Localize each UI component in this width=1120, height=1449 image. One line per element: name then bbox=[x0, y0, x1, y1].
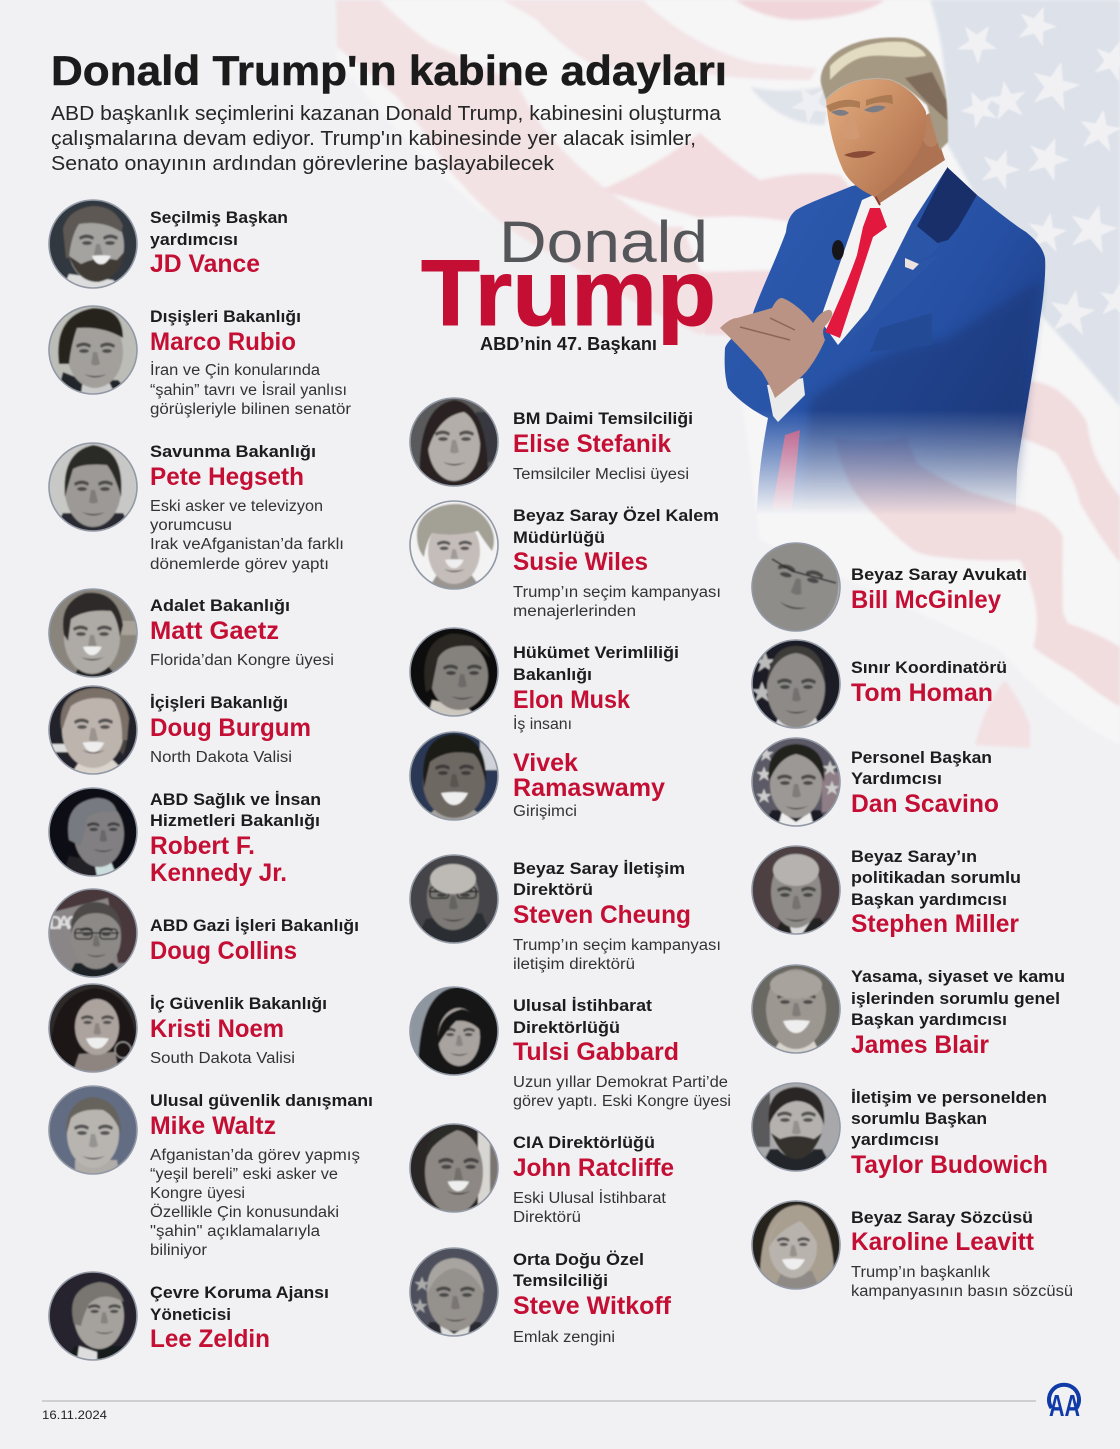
description bbox=[513, 584, 721, 620]
role bbox=[513, 1250, 644, 1290]
photo bbox=[752, 738, 840, 826]
photo bbox=[751, 537, 840, 633]
person: Tom Homan bbox=[752, 640, 1007, 728]
description: İş insanı bbox=[513, 715, 572, 733]
role bbox=[150, 1283, 329, 1324]
hair bbox=[821, 38, 948, 150]
description: Eski Ulusal İstihbarat bbox=[513, 1189, 667, 1207]
role: Müdürlüğü bbox=[513, 528, 605, 547]
description: Eski asker ve televizyon bbox=[150, 498, 323, 515]
description: görüşleriyle bilinen senatör bbox=[150, 401, 351, 418]
person: Elon Musk bbox=[410, 628, 679, 733]
role bbox=[513, 996, 652, 1037]
name: Taylor Budowich bbox=[851, 1151, 1048, 1179]
description: North Dakota Valisi bbox=[150, 749, 292, 766]
description: Özellikle Çin konusundaki bbox=[150, 1203, 339, 1221]
role: Yardımcısı bbox=[851, 769, 942, 788]
name: Kristi Noem bbox=[150, 1015, 284, 1043]
role: politikadan sorumlu bbox=[851, 868, 1021, 887]
logo: Anadolu Agency bbox=[1049, 1385, 1080, 1423]
name: Stephen Miller bbox=[851, 910, 1019, 938]
photo bbox=[49, 589, 137, 677]
role: Hükümet Verimliliği bbox=[513, 643, 679, 662]
photo bbox=[410, 732, 498, 820]
description bbox=[513, 1074, 731, 1110]
person: Dan Scavino bbox=[752, 738, 999, 826]
dark collar bbox=[915, 167, 977, 245]
description: Girişimci bbox=[513, 803, 577, 820]
description: Trump’ın seçim kampanyası bbox=[513, 937, 721, 954]
role: Beyaz Saray’ın bbox=[851, 847, 977, 866]
role: Çevre Koruma Ajansı bbox=[150, 1283, 329, 1302]
description: Uzun yıllar Demokrat Parti’de bbox=[513, 1074, 728, 1091]
description: biliniyor bbox=[150, 1242, 207, 1259]
name: Mike Waltz bbox=[150, 1112, 276, 1140]
role: sorumlu Başkan bbox=[851, 1109, 987, 1128]
Donald Trump portrait bbox=[720, 38, 1045, 530]
photo bbox=[410, 855, 498, 943]
photo bbox=[410, 628, 498, 716]
description: Afganistan’da görev yapmış bbox=[150, 1147, 360, 1164]
intro paragraph: Senato onayının ardından görevlerine başlayabilecek bbox=[51, 153, 555, 175]
person: Bill McGinley bbox=[751, 537, 1027, 633]
person: John Ratcliffe bbox=[410, 1124, 674, 1226]
name: Lee Zeldin bbox=[150, 1325, 270, 1353]
person: Susie Wiles bbox=[410, 501, 721, 620]
role bbox=[851, 748, 992, 788]
description: iletişim direktörü bbox=[513, 956, 635, 973]
role: Beyaz Saray İletişim bbox=[513, 859, 685, 878]
intro paragraph bbox=[51, 103, 722, 175]
role: Orta Doğu Özel bbox=[513, 1250, 644, 1269]
person: Steve Witkoff bbox=[410, 1248, 672, 1346]
name: James Blair bbox=[851, 1031, 989, 1059]
role: Başkan yardımcısı bbox=[851, 890, 1007, 909]
role bbox=[513, 506, 719, 547]
role: İletişim ve personelden bbox=[851, 1088, 1047, 1107]
description: dönemlerde görev yaptı bbox=[150, 556, 329, 573]
role: Adalet Bakanlığı bbox=[150, 596, 290, 615]
name: Elon Musk bbox=[513, 686, 630, 714]
photo bbox=[49, 984, 137, 1072]
photo bbox=[752, 1083, 840, 1171]
role: Başkan yardımcısı bbox=[851, 1010, 1007, 1029]
photo bbox=[410, 987, 498, 1075]
role bbox=[150, 208, 288, 249]
photo bbox=[49, 1086, 137, 1174]
shirt and collar bbox=[820, 155, 947, 345]
person: Stephen Miller bbox=[752, 846, 1021, 938]
person: Doug Burgum bbox=[49, 686, 311, 774]
role: Ulusal güvenlik danışmanı bbox=[150, 1091, 373, 1110]
person: Vivek Ramaswamy bbox=[410, 732, 665, 820]
description: görev yaptı. Eski Kongre üyesi bbox=[513, 1093, 731, 1110]
role: Dışişleri Bakanlığı bbox=[150, 307, 301, 326]
person: JD Vance bbox=[49, 200, 288, 288]
cuff bbox=[767, 378, 805, 422]
description bbox=[150, 498, 344, 573]
role: Yasama, siyaset ve kamu bbox=[851, 967, 1065, 986]
description: “yeşil bereli” eski asker ve bbox=[150, 1166, 338, 1183]
intro paragraph: ABD başkanlık seçimlerini kazanan Donald Trump, kabinesini oluşturma bbox=[51, 103, 722, 125]
centerpiece name: Donald Trump: ABD’nin 47. Başkanı bbox=[480, 334, 657, 354]
photo bbox=[49, 306, 137, 394]
description bbox=[150, 1147, 360, 1259]
name: Kennedy Jr. bbox=[150, 859, 287, 887]
description bbox=[513, 937, 721, 973]
name: Matt Gaetz bbox=[150, 617, 279, 645]
role bbox=[851, 1088, 1047, 1149]
role: Hizmetleri Bakanlığı bbox=[150, 811, 320, 830]
footer line bbox=[42, 1400, 1036, 1402]
role: Personel Başkan bbox=[851, 748, 992, 767]
name: Marco Rubio bbox=[150, 328, 296, 356]
photo bbox=[49, 788, 137, 876]
role: Direktörlüğü bbox=[513, 1018, 620, 1037]
person: Elise Stefanik bbox=[410, 398, 693, 486]
photo bbox=[49, 889, 137, 977]
microphone bbox=[832, 240, 844, 260]
role: BM Daimi Temsilciliği bbox=[513, 409, 693, 428]
face bbox=[826, 79, 926, 197]
person: Pete Hegseth bbox=[49, 442, 344, 573]
description: kampanyasının basın sözcüsü bbox=[851, 1283, 1073, 1300]
centerpiece name: Donald Trump: Trump bbox=[421, 240, 716, 345]
description: "şahin" açıklamalarıyla bbox=[150, 1223, 320, 1240]
role: yardımcısı bbox=[851, 1130, 939, 1149]
description: menajerlerinden bbox=[513, 603, 636, 620]
role: Sınır Koordinatörü bbox=[851, 658, 1007, 677]
suit bbox=[725, 167, 1045, 530]
name: Ramaswamy bbox=[513, 774, 665, 802]
role: Temsilciliği bbox=[513, 1271, 608, 1290]
name: Steve Witkoff bbox=[513, 1292, 672, 1320]
photo bbox=[410, 1124, 498, 1214]
neck bbox=[873, 140, 945, 203]
name bbox=[513, 749, 665, 802]
role bbox=[513, 859, 685, 899]
name: Pete Hegseth bbox=[150, 463, 304, 491]
role: Beyaz Saray Avukatı bbox=[851, 565, 1027, 584]
role bbox=[150, 790, 321, 830]
photo: DAC bbox=[49, 913, 79, 933]
hands bbox=[720, 298, 832, 398]
description: Trump’ın seçim kampanyası bbox=[513, 584, 721, 601]
person: Taylor Budowich bbox=[752, 1083, 1048, 1179]
photo bbox=[752, 1201, 840, 1289]
description: South Dakota Valisi bbox=[150, 1050, 295, 1067]
lapel bbox=[915, 226, 938, 245]
person: Tulsi Gabbard bbox=[410, 987, 731, 1110]
person: Doug Collins bbox=[49, 889, 359, 977]
role: Savunma Bakanlığı bbox=[150, 442, 316, 461]
person: Mike Waltz bbox=[49, 1086, 373, 1259]
logo: Anadolu Agency: AA bbox=[1049, 1388, 1080, 1423]
name: Karoline Leavitt bbox=[851, 1228, 1035, 1256]
description: İran ve Çin konularında bbox=[150, 361, 320, 379]
person: Lee Zeldin bbox=[49, 1272, 329, 1360]
photo bbox=[49, 443, 137, 531]
person: Karoline Leavitt bbox=[752, 1201, 1073, 1300]
tie bbox=[825, 208, 887, 338]
name: Elise Stefanik bbox=[513, 430, 671, 458]
name: Bill McGinley bbox=[851, 586, 1001, 614]
description: Irak veAfganistan’da farklı bbox=[150, 536, 344, 553]
role bbox=[851, 967, 1065, 1029]
name: John Ratcliffe bbox=[513, 1154, 674, 1182]
role bbox=[513, 643, 679, 684]
role: Yöneticisi bbox=[150, 1305, 231, 1324]
photo bbox=[752, 640, 840, 728]
role: Beyaz Saray Sözcüsü bbox=[851, 1208, 1033, 1227]
intro paragraph: çalışmalarına devam ediyor. Trump'ın kabinesinde yer alacak isimler, bbox=[51, 128, 696, 150]
name: Susie Wiles bbox=[513, 548, 648, 576]
description: Emlak zengini bbox=[513, 1329, 615, 1346]
role bbox=[851, 847, 1021, 909]
role: Bakanlığı bbox=[513, 665, 592, 684]
description bbox=[513, 1189, 667, 1226]
person: Matt Gaetz bbox=[49, 589, 334, 677]
centerpiece name: Donald Trump: Donald bbox=[499, 210, 708, 275]
photo bbox=[752, 846, 840, 934]
suit shading bbox=[800, 280, 1040, 520]
person: Marco Rubio bbox=[49, 306, 351, 418]
photo bbox=[410, 1248, 498, 1336]
description: Trump’ın başkanlık bbox=[851, 1264, 990, 1281]
photo bbox=[49, 1272, 137, 1360]
role: İçişleri Bakanlığı bbox=[150, 693, 288, 712]
name: Tulsi Gabbard bbox=[513, 1038, 679, 1066]
role: ABD Gazi İşleri Bakanlığı bbox=[150, 916, 359, 935]
role: İç Güvenlik Bakanlığı bbox=[150, 994, 327, 1013]
role: Direktörü bbox=[513, 880, 593, 899]
role: işlerinden sorumlu genel bbox=[851, 989, 1060, 1008]
name: Vivek bbox=[513, 749, 578, 777]
person: James Blair bbox=[752, 965, 1065, 1059]
photo bbox=[410, 501, 498, 589]
description bbox=[851, 1264, 1073, 1300]
role: Seçilmiş Başkan bbox=[150, 208, 288, 227]
photo bbox=[752, 965, 840, 1053]
name: Robert F. bbox=[150, 832, 255, 860]
background: American flag bbox=[336, 0, 1120, 748]
flag pin bbox=[905, 258, 919, 270]
role: ABD Sağlık ve İnsan bbox=[150, 790, 321, 809]
description bbox=[150, 361, 351, 418]
description: Florida’dan Kongre üyesi bbox=[150, 652, 334, 669]
description: Kongre üyesi bbox=[150, 1185, 245, 1202]
description: Temsilciler Meclisi üyesi bbox=[513, 466, 689, 483]
role: Beyaz Saray Özel Kalem bbox=[513, 506, 719, 525]
title: Donald Trump'ın kabine adayları bbox=[51, 47, 727, 94]
description: Direktörü bbox=[513, 1209, 581, 1226]
name: Doug Burgum bbox=[150, 714, 311, 742]
description: “şahin” tavrı ve İsrail yanlısı bbox=[150, 381, 347, 399]
photo bbox=[410, 398, 498, 486]
person: Kristi Noem bbox=[49, 984, 327, 1072]
lower trousers and tie bbox=[772, 430, 800, 510]
photo bbox=[49, 686, 137, 774]
person: Steven Cheung bbox=[410, 855, 721, 973]
name: Dan Scavino bbox=[851, 790, 999, 818]
name: JD Vance bbox=[150, 250, 260, 278]
role: yardımcısı bbox=[150, 230, 238, 249]
description: yorumcusu bbox=[150, 517, 232, 534]
name: Steven Cheung bbox=[513, 901, 691, 929]
person: Robert F. Kennedy Jr. bbox=[49, 788, 321, 887]
name: Doug Collins bbox=[150, 937, 297, 965]
role: CIA Direktörlüğü bbox=[513, 1133, 655, 1152]
name bbox=[150, 832, 287, 887]
photo bbox=[49, 200, 137, 288]
role: Ulusal İstihbarat bbox=[513, 996, 652, 1015]
name: Tom Homan bbox=[851, 679, 993, 707]
flag stars bbox=[783, 0, 1120, 337]
date: 16.11.2024 bbox=[42, 1410, 108, 1422]
ear bbox=[923, 113, 938, 147]
